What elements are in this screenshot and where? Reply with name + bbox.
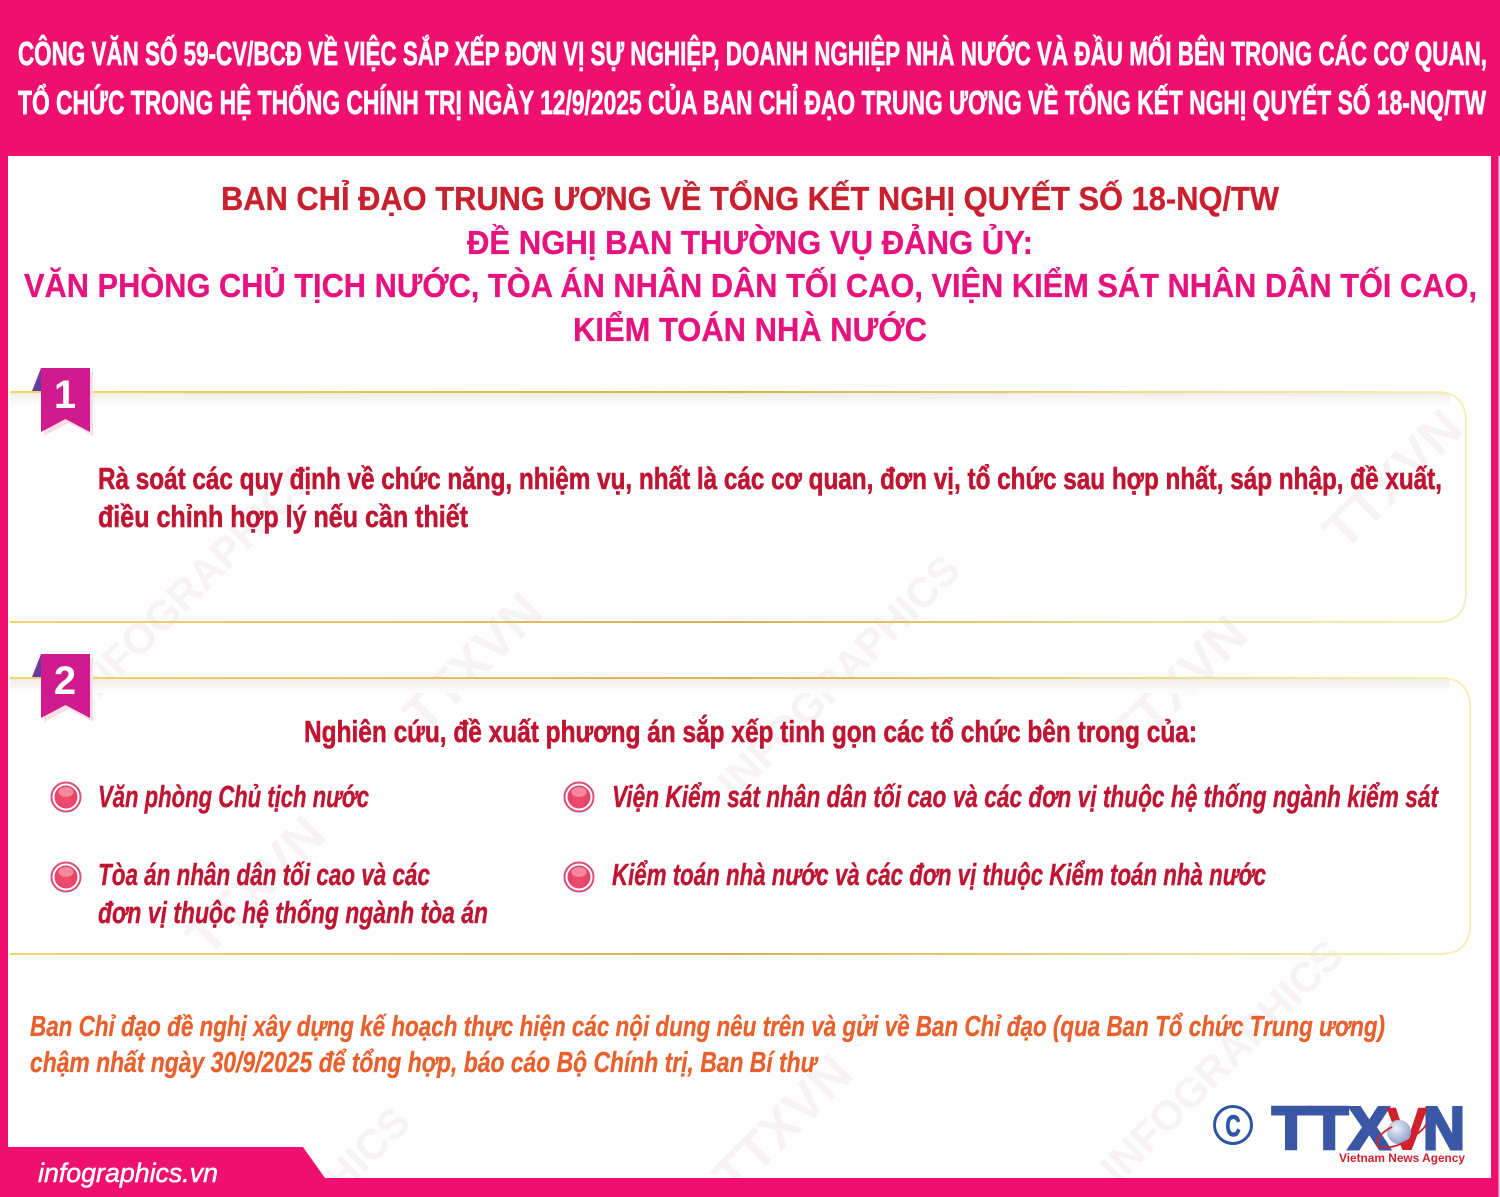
logo: TTXVN: Vietnam News Agency	[1339, 1151, 1465, 1165]
subheading: ĐỀ NGHỊ BAN THƯỜNG VỤ ĐẢNG ỦY:	[467, 224, 1033, 261]
watermark: INFOGRAPHICS	[708, 545, 969, 806]
panel 1 text: điều chỉnh hợp lý nếu cần thiết	[98, 499, 468, 534]
watermark: TTXVN	[175, 805, 337, 966]
icon: copyright: C	[1226, 1110, 1240, 1143]
closing note	[30, 1011, 1385, 1079]
item: Tòa án: Tòa án nhân dân tối cao và các	[98, 857, 430, 892]
panel 1 text	[98, 461, 1442, 534]
logo: TTXVN	[1214, 1095, 1465, 1165]
logo: TTXVN: V	[1386, 1095, 1428, 1163]
subheading	[24, 179, 1477, 348]
logo: TTXVN: TTX	[1272, 1095, 1390, 1162]
ribbon 1	[32, 368, 93, 436]
watermark: TTXVN	[392, 582, 554, 743]
footer tab: infographics.vn	[38, 1158, 218, 1188]
item: Kiểm toán	[564, 857, 1266, 892]
closing note: chậm nhất ngày 30/9/2025 để tổng hợp, báo cáo Bộ Chính trị, Ban Bí thư	[30, 1047, 819, 1079]
ribbon 2: 2	[54, 659, 76, 703]
watermark: TTXVN	[1097, 605, 1259, 766]
ribbon 1: 1	[54, 373, 76, 417]
subheading: BAN CHỈ ĐẠO TRUNG ƯƠNG VỀ TỔNG KẾT NGHỊ QUYẾT SỐ 18-NQ/TW	[221, 179, 1280, 217]
panel 1	[10, 368, 1466, 622]
subheading: KIỂM TOÁN NHÀ NƯỚC	[573, 311, 927, 348]
footer tab	[0, 1147, 325, 1197]
item: Văn phòng Chủ tịch nước: Văn phòng Chủ tịch nước	[98, 779, 369, 814]
panel 2	[10, 654, 1470, 954]
panel 2 heading: Nghiên cứu, đề xuất phương án sắp xếp tinh gọn các tổ chức bên trong của:	[304, 713, 1197, 749]
icon: copyright	[1214, 1106, 1252, 1144]
watermark	[63, 399, 1474, 1197]
watermark: INFOGRAPHICS	[1091, 930, 1352, 1191]
watermark: TTXVN	[1312, 399, 1474, 560]
item: Văn phòng Chủ tịch nước	[52, 779, 369, 814]
watermark: INFOGRAPHICS	[63, 453, 324, 714]
item: Kiểm toán: Kiểm toán nhà nước và các đơn vị thuộc Kiểm toán nhà nước	[612, 857, 1266, 892]
logo: TTXVN: N	[1423, 1095, 1465, 1162]
item: Tòa án: đơn vị thuộc hệ thống ngành tòa án	[98, 895, 488, 930]
item: Tòa án	[52, 857, 488, 930]
ribbon 2	[32, 654, 93, 722]
header title	[18, 34, 1487, 121]
